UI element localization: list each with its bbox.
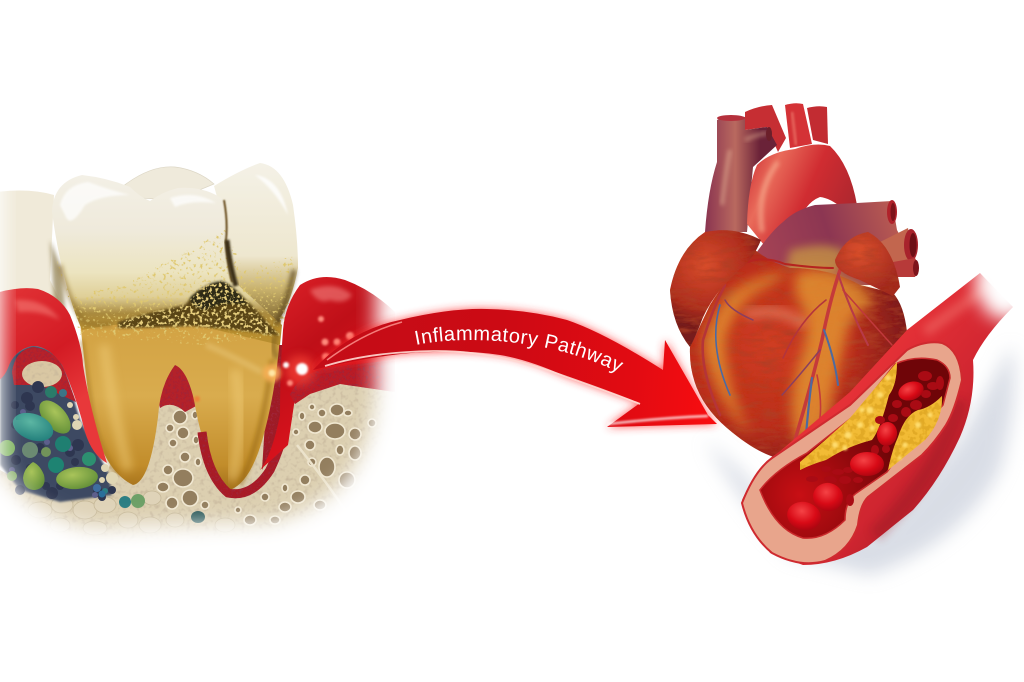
green bacterium: [39, 400, 71, 434]
jaw bone: [0, 360, 400, 560]
arrow: inflammatory pathway: [313, 302, 720, 434]
neighbouring tooth shadow: [50, 240, 66, 320]
pulmonary veins: [880, 228, 919, 277]
aortic arch branch vessels: [785, 103, 828, 148]
left gum: [0, 288, 107, 463]
periodontal pocket: cavity behind left gum: [0, 345, 112, 502]
yellow fat patches: [703, 269, 875, 445]
right gum: [260, 277, 395, 470]
red tissue in pocket: [12, 347, 76, 402]
aortic arch: [747, 145, 857, 245]
right atrium appendage: [835, 232, 900, 296]
small colony spheres: [0, 386, 145, 508]
red tissue at furcation: [159, 365, 196, 412]
tube highlight: [925, 285, 990, 332]
front crown: [52, 175, 282, 345]
bacteria cluster: [0, 381, 145, 508]
large green bacterium: [56, 466, 98, 490]
left atrium appendage: [670, 230, 761, 347]
small green bacterium: [23, 462, 45, 490]
arrow highlights: [325, 351, 640, 404]
arrow glow: [313, 309, 717, 427]
upper plaque: [800, 362, 897, 470]
teal bacterium: [12, 412, 54, 442]
tooth roots: [80, 320, 281, 490]
lower plaque: [888, 396, 942, 470]
back crown cusp: [214, 163, 298, 345]
rear tooth cusp: [122, 167, 214, 200]
tartar band: [60, 200, 294, 358]
bone nerve strand: [296, 444, 336, 496]
red tissue behind right root: [262, 345, 282, 470]
heart and artery cast shadow: [705, 345, 1014, 575]
panel: diseased tooth cross-section: [0, 163, 400, 560]
bone inside pocket: [22, 361, 62, 387]
ventricles: [690, 250, 907, 462]
arrow label: Inflammatory Pathway: [415, 326, 624, 374]
gum highlight: [310, 286, 352, 302]
small blood cells: [806, 371, 944, 506]
red tissue around right root: [202, 415, 288, 494]
large blood cells: [784, 378, 926, 534]
wall cut face: [742, 342, 962, 563]
arrow body: [313, 309, 717, 427]
inflamed tissue along bone crest: [290, 360, 395, 404]
root shading: [82, 340, 272, 484]
lumen: [760, 358, 950, 538]
crown highlights: [60, 175, 288, 221]
bone lumps: [30, 490, 235, 530]
plaque speckles: [55, 230, 296, 345]
panel: artery cross-section with plaque: [742, 273, 1013, 565]
panel: heart: [670, 103, 919, 462]
coronary vessels: [703, 259, 892, 440]
infographic canvas: [0, 103, 1021, 580]
superior vena cava and branches: [705, 115, 777, 232]
artery tube: [742, 273, 1013, 565]
pulmonary trunk: [750, 200, 905, 285]
branch vessel behind vena cava: [745, 105, 786, 152]
neighbouring tooth: [0, 191, 62, 305]
aortic highlight: [761, 162, 778, 232]
muscle highlight: [745, 312, 805, 325]
left gum highlight: [15, 300, 60, 320]
bone pores: [157, 404, 376, 525]
glowing inflammation points: [194, 316, 354, 402]
